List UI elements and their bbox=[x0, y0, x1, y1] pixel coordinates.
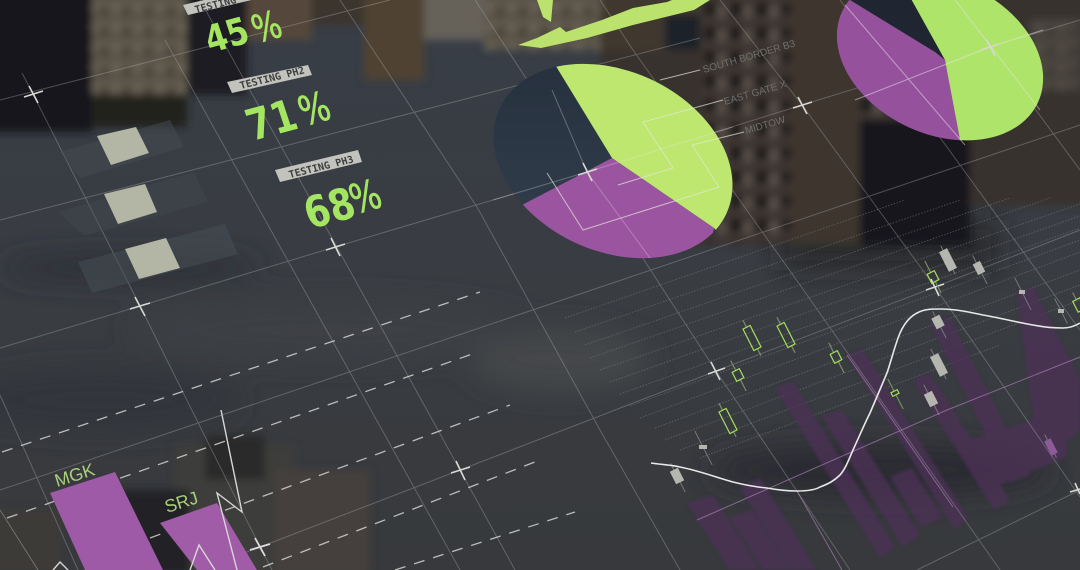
panel: testing phase 2: % bbox=[292, 82, 337, 135]
map location labels: EAST GATE X bbox=[723, 79, 788, 108]
line chart curve bbox=[651, 309, 1080, 491]
pie overlay grid highlights bbox=[493, 0, 1043, 258]
map location labels: SOUTH BORDER B3 bbox=[702, 38, 797, 76]
pie chart 1 bbox=[494, 64, 744, 258]
faint dotted chart rules bbox=[565, 198, 1080, 458]
dashed trend lines bbox=[2, 292, 575, 570]
panel: testing phase 1: 45 bbox=[199, 10, 255, 62]
panel: testing phase 2 bbox=[227, 65, 337, 151]
bar: MGK: MGK bbox=[52, 459, 97, 491]
crosshair markers bbox=[24, 39, 1080, 494]
pie chart 2 bbox=[836, 0, 1044, 140]
bar: SRJ bbox=[160, 488, 257, 570]
candlestick chart bbox=[667, 244, 1080, 494]
map silhouette bbox=[518, 0, 710, 48]
panel: testing phase 2: TESTING PH2 bbox=[239, 65, 306, 92]
panel: testing phase 3: TESTING PH3 bbox=[288, 154, 355, 181]
bar: SRJ: SRJ bbox=[162, 488, 200, 517]
bar chart spike line bbox=[53, 410, 242, 570]
pink highlight lines over bars bbox=[697, 355, 1080, 570]
panel: testing phase 3: 68 bbox=[298, 179, 362, 239]
purple bar chart background bbox=[687, 287, 1080, 570]
crosshair over SRJ bar bbox=[250, 538, 270, 556]
grey candles bbox=[667, 244, 1071, 494]
panel: testing phase 3: % bbox=[343, 170, 388, 223]
map location labels: MIDTOW bbox=[744, 115, 787, 137]
map location labels bbox=[702, 38, 797, 137]
panel: legend swatches bbox=[58, 120, 238, 293]
panel: testing phase 2: 71 bbox=[240, 91, 304, 151]
green outlined candles bbox=[715, 259, 1080, 439]
panel: testing phase 1 bbox=[183, 0, 288, 62]
map route overlay bbox=[547, 70, 744, 230]
bar: MGK bbox=[50, 459, 163, 570]
panel: testing phase 3 bbox=[275, 150, 388, 239]
panel: testing phase 1: % bbox=[246, 3, 288, 52]
